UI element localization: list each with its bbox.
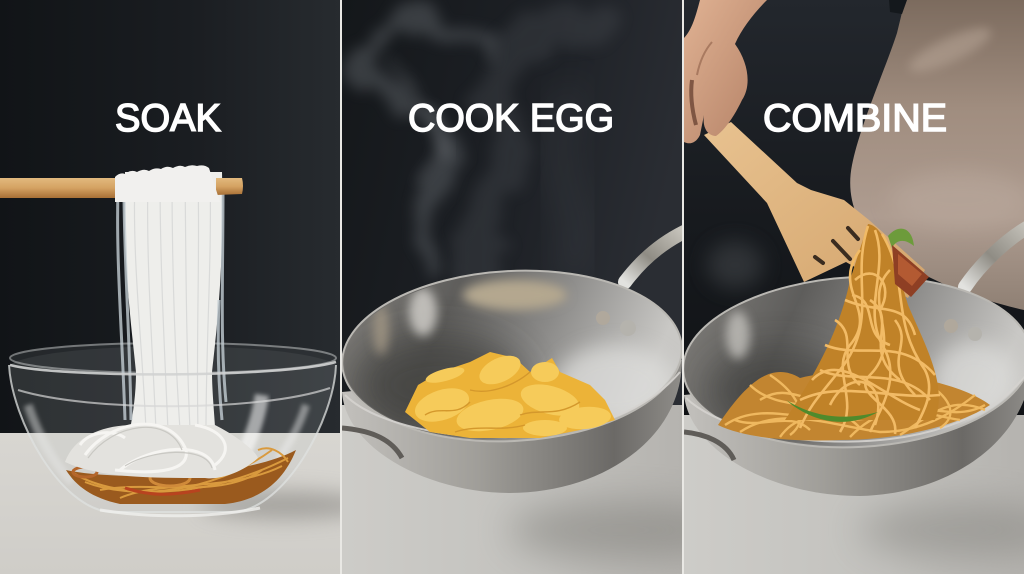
panel: soak bbox=[0, 0, 370, 574]
title: combine: COMBINE bbox=[763, 97, 947, 140]
background wall bbox=[0, 0, 340, 434]
marble counter bbox=[684, 415, 1024, 574]
hand bbox=[684, 0, 767, 143]
steam bbox=[360, 20, 590, 270]
lifted noodles bbox=[785, 224, 939, 420]
pan bbox=[338, 262, 686, 493]
panel: combine bbox=[679, 0, 1024, 574]
counter shadow bbox=[510, 500, 730, 560]
chopstick bbox=[0, 165, 243, 202]
rivets bbox=[944, 319, 958, 333]
pan handle bbox=[625, 232, 684, 282]
panel: cook egg bbox=[342, 0, 682, 574]
front handle bbox=[684, 432, 734, 460]
green onion bbox=[786, 400, 878, 422]
scrambled egg bbox=[405, 350, 615, 438]
spatula burnt edge bbox=[892, 245, 929, 297]
pan bbox=[679, 268, 1024, 496]
front handle bbox=[342, 428, 402, 458]
marble counter bbox=[0, 433, 340, 574]
steam bbox=[707, 241, 763, 289]
glass bowl front rim bbox=[9, 362, 336, 516]
title: cook egg: COOK EGG bbox=[408, 97, 614, 140]
background wall bbox=[684, 0, 1024, 440]
bowl shadow bbox=[200, 491, 370, 519]
glass bowl back bbox=[9, 342, 337, 480]
background wall bbox=[342, 0, 682, 430]
wooden spatula bbox=[704, 122, 925, 298]
noodle coil bbox=[65, 424, 258, 478]
pan handle bbox=[965, 226, 1024, 287]
marble counter bbox=[342, 405, 682, 574]
title: soak: SOAK bbox=[115, 97, 221, 140]
noodles in pan bbox=[718, 224, 990, 440]
counter shadow bbox=[860, 502, 1024, 558]
orange noodles and liquid bbox=[66, 448, 296, 504]
apron bbox=[850, 0, 1024, 310]
rivets bbox=[596, 311, 610, 325]
hanging glass noodles bbox=[118, 172, 226, 440]
